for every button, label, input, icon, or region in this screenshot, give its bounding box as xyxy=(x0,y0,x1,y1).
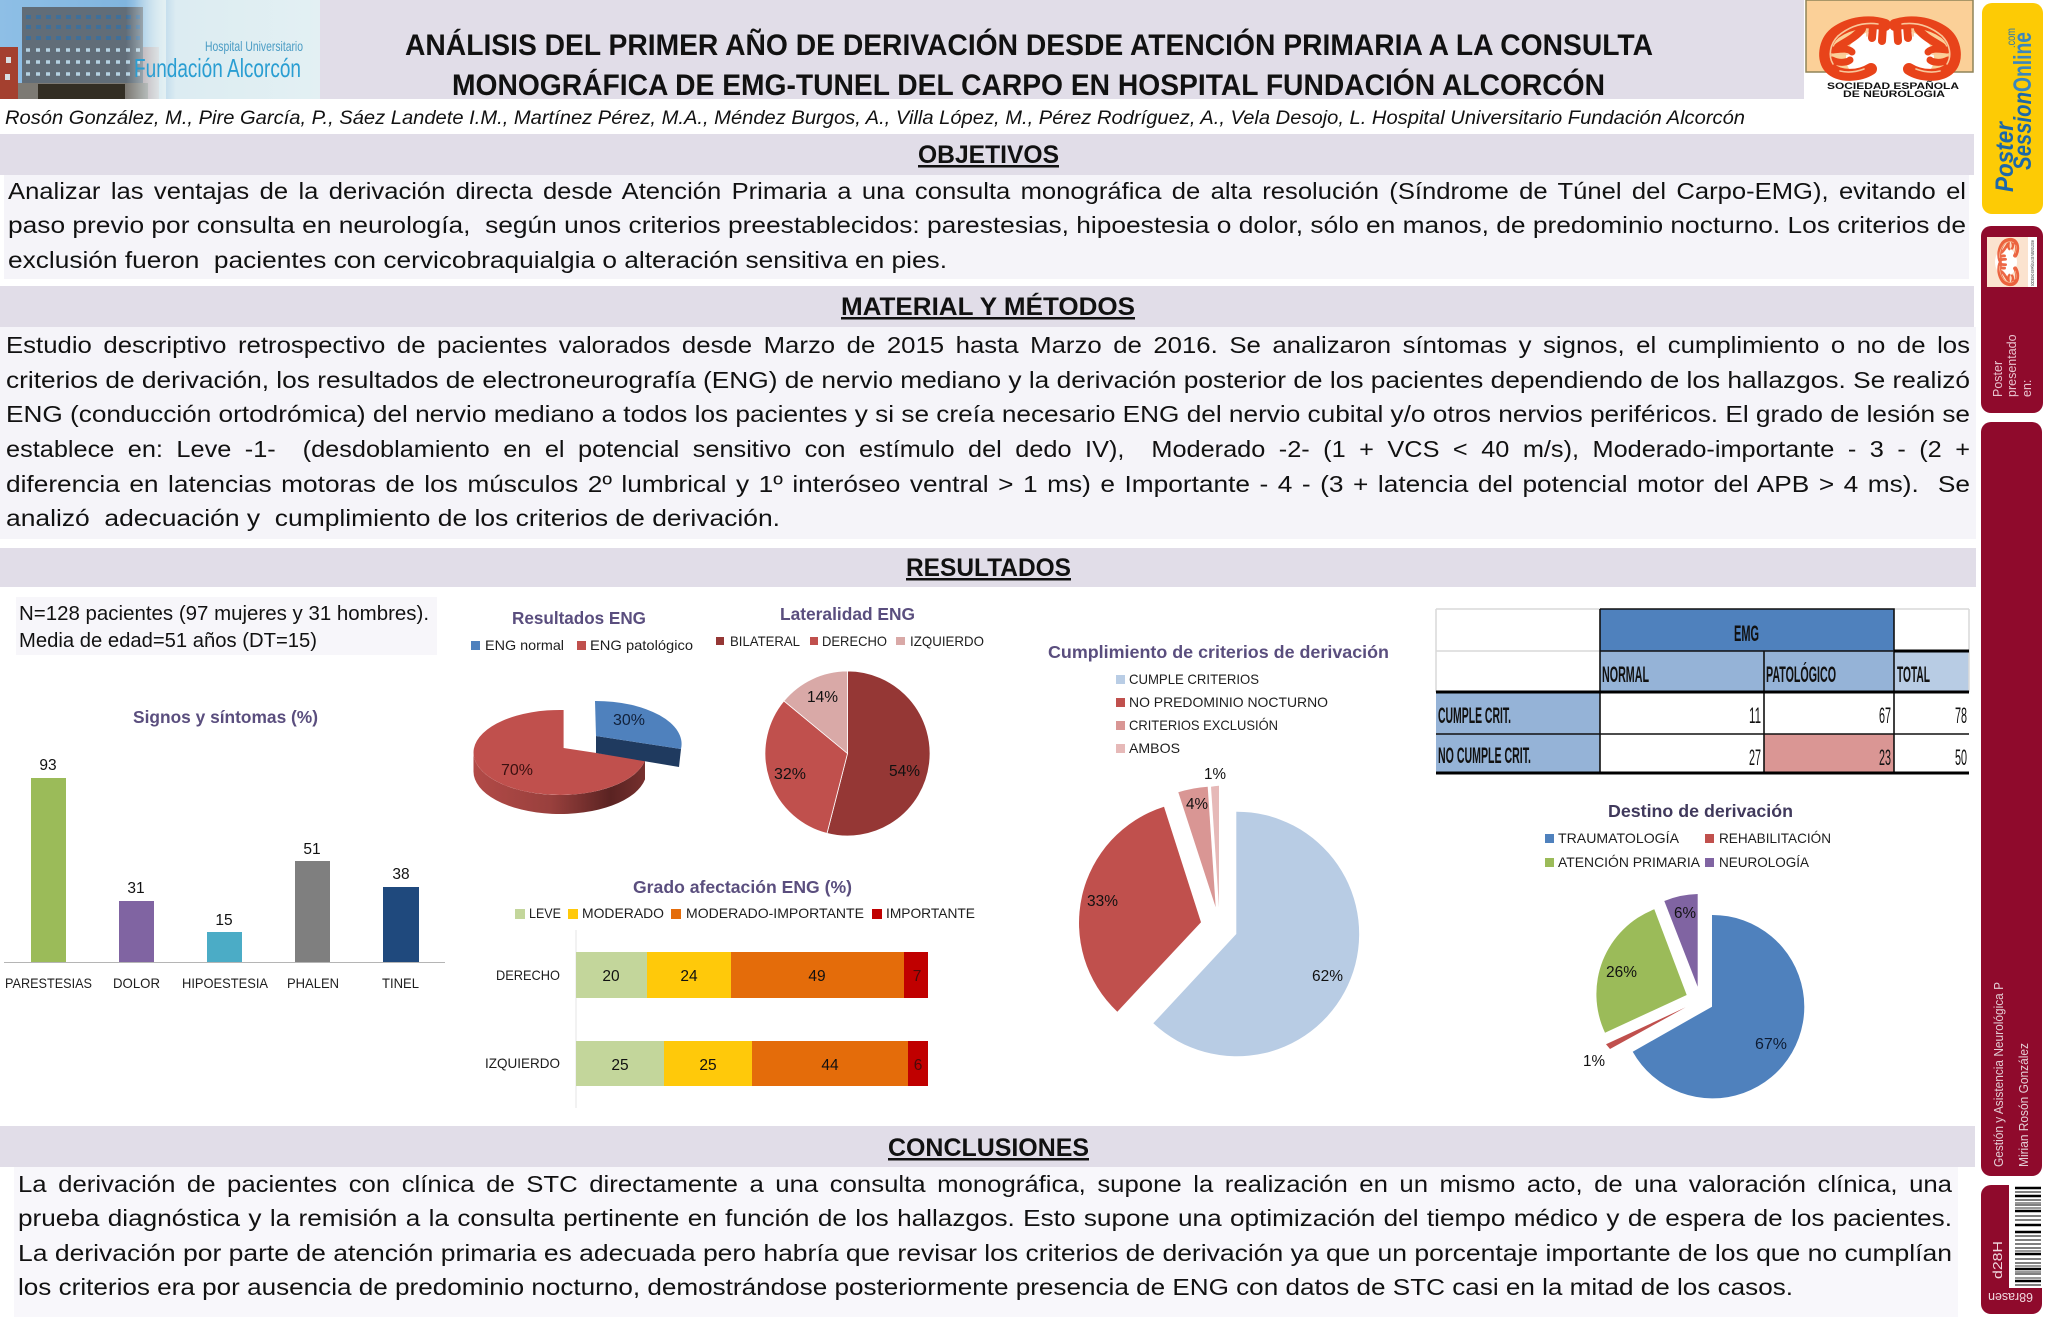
barcode bars xyxy=(2015,1188,2041,1285)
sidebar tab: barcode: 68rasen xyxy=(1988,1290,2033,1304)
legend: NO PREDOMINIO NOCTURNO xyxy=(1129,694,1328,710)
stacked bar chart: grado afectacion ENG: 6 xyxy=(914,1057,922,1074)
sidebar tab: poster presentado en xyxy=(1981,226,2043,413)
material y metodos text: Estudio descriptivo retrospectivo de pacientes valorados desde Marzo de 2015 hasta Marzo de 2016. Se analizaron síntomas y signos, el cumplimiento o no de los xyxy=(6,332,1970,358)
stacked bar chart: grado afectacion ENG: 25 xyxy=(699,1057,717,1074)
heading: objetivos: OBJETIVOS xyxy=(918,141,1059,169)
bar chart: signos y sintomas: TINEL xyxy=(382,975,419,991)
logo: Sociedad Española de Neurología: SOCIEDAD ESPAÑOLA xyxy=(1827,81,1959,92)
bar chart: signos y sintomas: 51 xyxy=(303,841,321,858)
table: EMG vs criterios: PATOLÓGICO xyxy=(1766,662,1836,687)
pie chart: cumplimiento de criterios: 1% xyxy=(1204,766,1226,783)
objetivos text: exclusión fueron pacientes con cervicobraquialgia o alteración sensitiva en pies. xyxy=(8,247,947,273)
material y metodos text: criterios de derivación, los resultados de electroneurografía (ENG) de nervio mediano y la derivación posterior de los pacientes dependiendo de los hallazgos. Se realizó xyxy=(6,367,1970,393)
legend xyxy=(471,637,693,653)
sidebar tab: PosterSessionOnline: Session xyxy=(2009,92,2037,170)
table: EMG vs criterios: 23 xyxy=(1879,745,1891,770)
table: EMG vs criterios: 11 xyxy=(1749,703,1761,728)
stacked bar chart: grado afectacion ENG: DERECHO xyxy=(496,967,560,983)
legend: ENG patológico xyxy=(590,637,693,653)
objetivos text xyxy=(8,178,1966,273)
sidebar tab: barcode xyxy=(1981,1185,2042,1314)
legend: CRITERIOS EXCLUSIÓN xyxy=(1129,717,1278,733)
legend: BILATERAL xyxy=(730,633,800,649)
stacked bar chart: grado afectacion ENG: 44 xyxy=(821,1057,839,1074)
title: ANÁLISIS DEL PRIMER AÑO DE DERIVACIÓN DESDE ATENCIÓN PRIMARIA A LA CONSULTA xyxy=(405,28,1653,62)
legend: REHABILITACIÓN xyxy=(1719,830,1831,846)
chart title: Signos y síntomas (%) xyxy=(133,707,318,727)
sidebar tab: PosterSessionOnline: Poster xyxy=(1991,121,2019,192)
hospital logo with building photo xyxy=(0,0,320,99)
bar chart: signos y sintomas: HIPOESTESIA xyxy=(182,975,269,991)
stacked bar chart: grado afectacion ENG: 7 xyxy=(913,968,921,985)
stacked bar chart: grado afectacion ENG: 25 xyxy=(611,1057,629,1074)
table: EMG vs criterios: 78 xyxy=(1955,703,1967,728)
sidebar tab: session and author xyxy=(1981,422,2042,1176)
conclusiones text: prueba diagnóstica y la remisión a la consulta pertinente en función de los hallazgos. Esto supone una optimización del tiempo médico y de espera de los pacientes. xyxy=(18,1205,1952,1231)
sidebar tab: PosterSessionOnline: .com xyxy=(2004,28,2018,48)
table: EMG vs criterios: 67 xyxy=(1879,703,1891,728)
legend: MODERADO xyxy=(582,905,664,921)
stacked bar chart: grado afectacion ENG: IZQUIERDO xyxy=(485,1055,560,1071)
chart title: Lateralidad ENG xyxy=(780,604,915,624)
bar chart: signos y sintomas: DOLOR xyxy=(113,975,160,991)
hospital name: Hospital Universitario xyxy=(205,38,303,54)
bar chart: signos y sintomas xyxy=(4,707,445,991)
pie chart: lateralidad ENG: 14% xyxy=(807,689,838,706)
legend: CUMPLE CRITERIOS xyxy=(1129,671,1259,687)
stacked bar chart: grado afectacion ENG xyxy=(485,877,975,1108)
bar chart: signos y sintomas: PARESTESIAS xyxy=(5,975,92,991)
bar chart: signos y sintomas: PHALEN xyxy=(287,975,339,991)
heading: resultados: RESULTADOS xyxy=(906,554,1071,582)
chart title: Destino de derivación xyxy=(1608,801,1793,821)
legend: IMPORTANTE xyxy=(886,905,975,921)
table: EMG vs criterios: 50 xyxy=(1955,745,1967,770)
sidebar tab: session and author: Mirian Rosón González xyxy=(2017,1043,2031,1167)
conclusiones text: La derivación de pacientes con clínica de STC directamente a una consulta monográfica, supone la realización en un mismo acto, de una valoración clínica, una xyxy=(18,1171,1953,1197)
section: conclusiones xyxy=(0,1126,1975,1317)
pie chart: cumplimiento de criterios: 4% xyxy=(1186,796,1208,813)
pie chart: destino de derivacion: 67% xyxy=(1755,1036,1787,1053)
pie chart: cumplimiento de criterios: 62% xyxy=(1312,968,1343,985)
bar chart: signos y sintomas: 38 xyxy=(392,866,410,883)
section: objetivos xyxy=(0,134,1974,279)
logo: Sociedad Española de Neurología: DE NEUROLOGIA xyxy=(1843,89,1945,100)
pie chart: lateralidad ENG xyxy=(716,604,984,836)
pie chart: destino de derivacion: 26% xyxy=(1606,964,1637,981)
sidebar tab: PosterSessionOnline: Online xyxy=(2009,32,2037,92)
legend xyxy=(716,633,984,649)
legend xyxy=(1116,671,1328,756)
legend xyxy=(515,905,975,921)
pie chart: resultados ENG: 70% xyxy=(501,762,533,779)
legend: MODERADO-IMPORTANTE xyxy=(686,905,864,921)
authors: Rosón González, M., Pire García, P., Sáez Landete I.M., Martínez Pérez, M.A., Méndez Burgos, A., Villa López, M., Pérez Rodríguez, A., Vela Desojo, L. Hospital Universitario Fundación Alcorcón xyxy=(5,107,1745,129)
stacked bar chart: grado afectacion ENG: 20 xyxy=(602,968,620,985)
conclusiones text xyxy=(18,1171,1953,1300)
chart title: Resultados ENG xyxy=(512,608,646,628)
legend: ATENCIÓN PRIMARIA xyxy=(1558,854,1701,870)
legend: NEUROLOGÍA xyxy=(1719,854,1810,870)
heading: conclusiones: CONCLUSIONES xyxy=(888,1134,1089,1162)
patient summary box: N=128 pacientes (97 mujeres y 31 hombres). xyxy=(19,602,429,625)
pie chart: lateralidad ENG: 54% xyxy=(889,763,920,780)
patient summary box xyxy=(16,597,437,655)
table: EMG vs criterios: CUMPLE CRIT. xyxy=(1438,703,1511,728)
stacked bar chart: grado afectacion ENG: 49 xyxy=(808,968,826,985)
mini society logo: SOCIEDAD ESPAÑOLA DE NEUROLOGIA xyxy=(2029,240,2035,286)
table: EMG vs criterios: TOTAL xyxy=(1897,662,1930,687)
pie chart: cumplimiento de criterios xyxy=(1048,642,1389,1056)
legend: AMBOS xyxy=(1129,740,1180,756)
pie chart: destino de derivacion xyxy=(1545,801,1831,1098)
legend: LEVE xyxy=(529,905,561,921)
heading: material y metodos: MATERIAL Y MÉTODOS xyxy=(841,292,1135,321)
bar chart: signos y sintomas: 15 xyxy=(215,912,233,929)
pie chart: destino de derivacion: 6% xyxy=(1674,905,1696,922)
heading: resultados xyxy=(0,548,1976,587)
title: MONOGRÁFICA DE EMG-TUNEL DEL CARPO EN HOSPITAL FUNDACIÓN ALCORCÓN xyxy=(452,68,1605,102)
legend: IZQUIERDO xyxy=(910,633,984,649)
hospital logo with building photo: Fundación Alcorcón xyxy=(134,53,301,83)
patient summary box: Media de edad=51 años (DT=15) xyxy=(19,629,317,652)
conclusiones text: los criterios era por ausencia de predominio nocturno, demostrándose posteriormente presencia de ENG con datos de STC casi en la mitad de los casos. xyxy=(18,1274,1793,1300)
logo: Sociedad Española de Neurología xyxy=(1806,0,1973,100)
table: EMG vs criterios xyxy=(1436,609,1969,773)
table: EMG vs criterios: NO CUMPLE CRIT. xyxy=(1438,743,1531,768)
section: material y metodos xyxy=(0,286,1976,539)
title xyxy=(405,28,1653,102)
label text: Poster xyxy=(1991,361,2005,397)
chart title: Cumplimiento de criterios de derivación xyxy=(1048,642,1389,662)
material y metodos text: ENG (conducción ortodrómica) del nervio mediano a todos los pacientes y si se creía necesario ENG del nervio cubital y/o otros nervios periféricos. El grado de lesión se xyxy=(6,401,1970,427)
bar chart: signos y sintomas: 31 xyxy=(127,880,145,897)
table: EMG vs criterios: EMG xyxy=(1734,621,1759,646)
material y metodos text: diferencia en latencias motoras de los músculos 2º lumbrical y 1º interóseo ventral > 1 ms) e Importante - 4 - (3 + latencia del potencial motor del APB > 4 ms). Se xyxy=(6,471,1970,497)
pie chart: lateralidad ENG: 32% xyxy=(774,766,806,783)
conclusiones text: La derivación por parte de atención primaria es adecuada pero habría que revisar los criterios de derivación ya que un porcentaje importante de los que no cumplían xyxy=(18,1240,1952,1266)
sidebar tab: barcode: d28H xyxy=(1990,1241,2005,1279)
bar chart: signos y sintomas: 93 xyxy=(39,757,57,774)
stacked bar chart: grado afectacion ENG: 24 xyxy=(680,968,698,985)
mini society logo xyxy=(1987,237,2037,287)
pie chart: resultados ENG xyxy=(471,608,693,814)
label text: presentado xyxy=(2005,334,2019,397)
legend: ENG normal xyxy=(485,637,564,653)
material y metodos text: establece en: Leve -1- (desdoblamiento en el potencial sensitivo con estímulo del dedo IV), Moderado -2- (1 + VCS < 40 m/s), Moderado-importante - 3 - (2 + xyxy=(6,436,1970,462)
material y metodos text: analizó adecuación y cumplimiento de los criterios de derivación. xyxy=(6,505,780,531)
chart title: Grado afectación ENG (%) xyxy=(633,877,852,897)
material y metodos text xyxy=(6,332,1970,531)
label text xyxy=(1991,334,2034,397)
objetivos text: Analizar las ventajas de la derivación directa desde Atención Primaria a una consulta monográfica de alta resolución (Síndrome de Túnel del Carpo-EMG), evitando el xyxy=(8,178,1966,204)
objetivos text: paso previo por consulta en neurología, según unos criterios preestablecidos: parestesias, hipoestesia o dolor, sólo en manos, de predominio nocturno. Los criterios de xyxy=(8,212,1966,238)
header band xyxy=(0,0,1804,99)
table: EMG vs criterios: 27 xyxy=(1749,745,1761,770)
legend: DERECHO xyxy=(822,633,887,649)
pie chart: resultados ENG: 30% xyxy=(613,712,645,729)
table: EMG vs criterios: NORMAL xyxy=(1602,662,1649,687)
label text: en: xyxy=(2020,380,2034,397)
sidebar tab: session and author: Gestión y Asistencia Neurológica P xyxy=(1992,982,2006,1167)
legend: TRAUMATOLOGÍA xyxy=(1558,830,1680,846)
pie chart: cumplimiento de criterios: 33% xyxy=(1087,893,1118,910)
sidebar tab: PosterSessionOnline xyxy=(1982,3,2043,214)
legend xyxy=(1545,830,1831,870)
pie chart: destino de derivacion: 1% xyxy=(1583,1053,1605,1070)
